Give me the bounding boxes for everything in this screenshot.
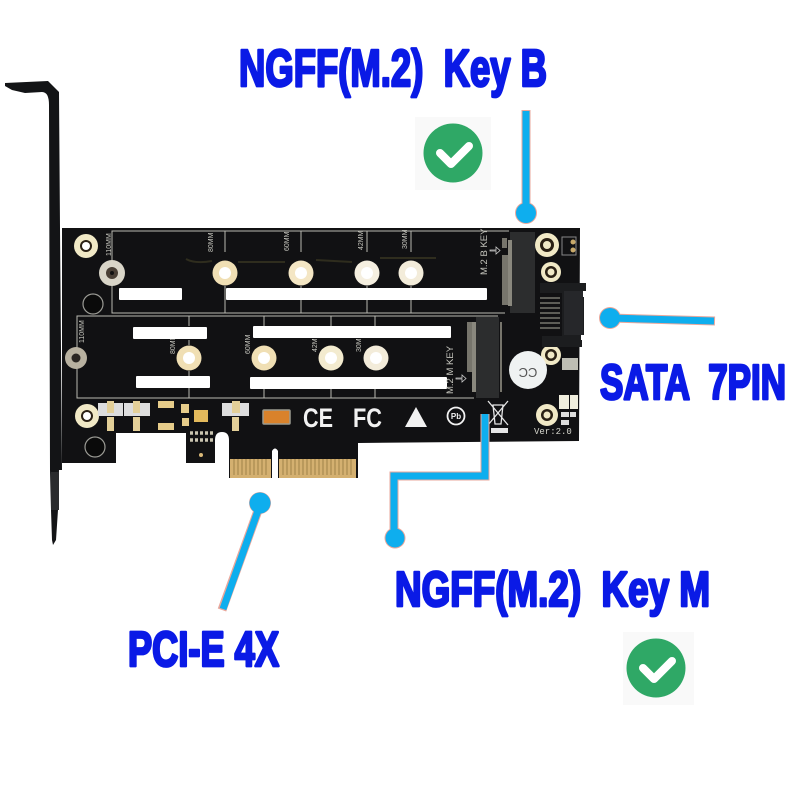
callout line: PCI-E	[222, 492, 271, 610]
SMD components, bottom left	[98, 401, 249, 457]
SATA connector	[540, 283, 586, 347]
callout line: SATA	[599, 307, 715, 329]
M.2 B key bay outline: 42MM	[358, 230, 365, 250]
gold edge connector	[230, 448, 356, 478]
M.2 M key bay outline: 110MM	[79, 320, 86, 343]
label: PCI-E 4X: PCI-E 4X	[128, 623, 279, 677]
certification marks: FC	[353, 403, 382, 433]
M.2 B key bay outline: 110MM	[106, 233, 113, 256]
circuit board	[62, 228, 586, 478]
metal bracket	[5, 81, 62, 545]
callout line: Key B	[515, 110, 537, 224]
callout line: Key M	[384, 414, 485, 548]
M.2 M key bay outline: 60MM	[245, 334, 252, 354]
M.2 M key bay outline: 80MM	[170, 334, 177, 354]
M.2 B key bay outline: 80MM	[208, 232, 215, 252]
M.2 B key bay outline	[106, 229, 509, 313]
M.2 B key bay outline: 30MM	[402, 229, 409, 249]
check icon: Key M	[623, 632, 694, 705]
tantalum capacitor	[263, 410, 290, 424]
mounting holes	[176, 260, 424, 370]
white sticker: CC	[519, 365, 537, 380]
certification marks: CE	[303, 403, 333, 433]
M.2 B key connector	[479, 228, 535, 313]
small SMD pads, top right	[559, 237, 578, 425]
certification marks: Pb	[451, 412, 461, 421]
board cutouts	[119, 288, 487, 389]
M.2 M key bay outline: 30MM	[356, 332, 363, 352]
heading: NGFF(M.2) Key B: NGFF(M.2) Key B	[239, 40, 547, 98]
board body	[62, 228, 580, 478]
M.2 M key bay outline	[77, 316, 498, 398]
version text: Ver:2.0	[534, 427, 572, 437]
M.2 M key bay outline: 42MM	[312, 332, 319, 352]
M.2 B key bay outline: 60MM	[284, 231, 291, 251]
M.2 B key connector: M.2 B KEY	[479, 228, 490, 275]
M.2 M key connector	[445, 317, 502, 398]
white sticker	[509, 351, 547, 389]
M.2 M key connector: M.2 M KEY	[445, 345, 456, 394]
certification marks	[303, 401, 508, 433]
check icon: Key B	[415, 117, 491, 190]
ring pads and standoffs	[65, 233, 561, 457]
